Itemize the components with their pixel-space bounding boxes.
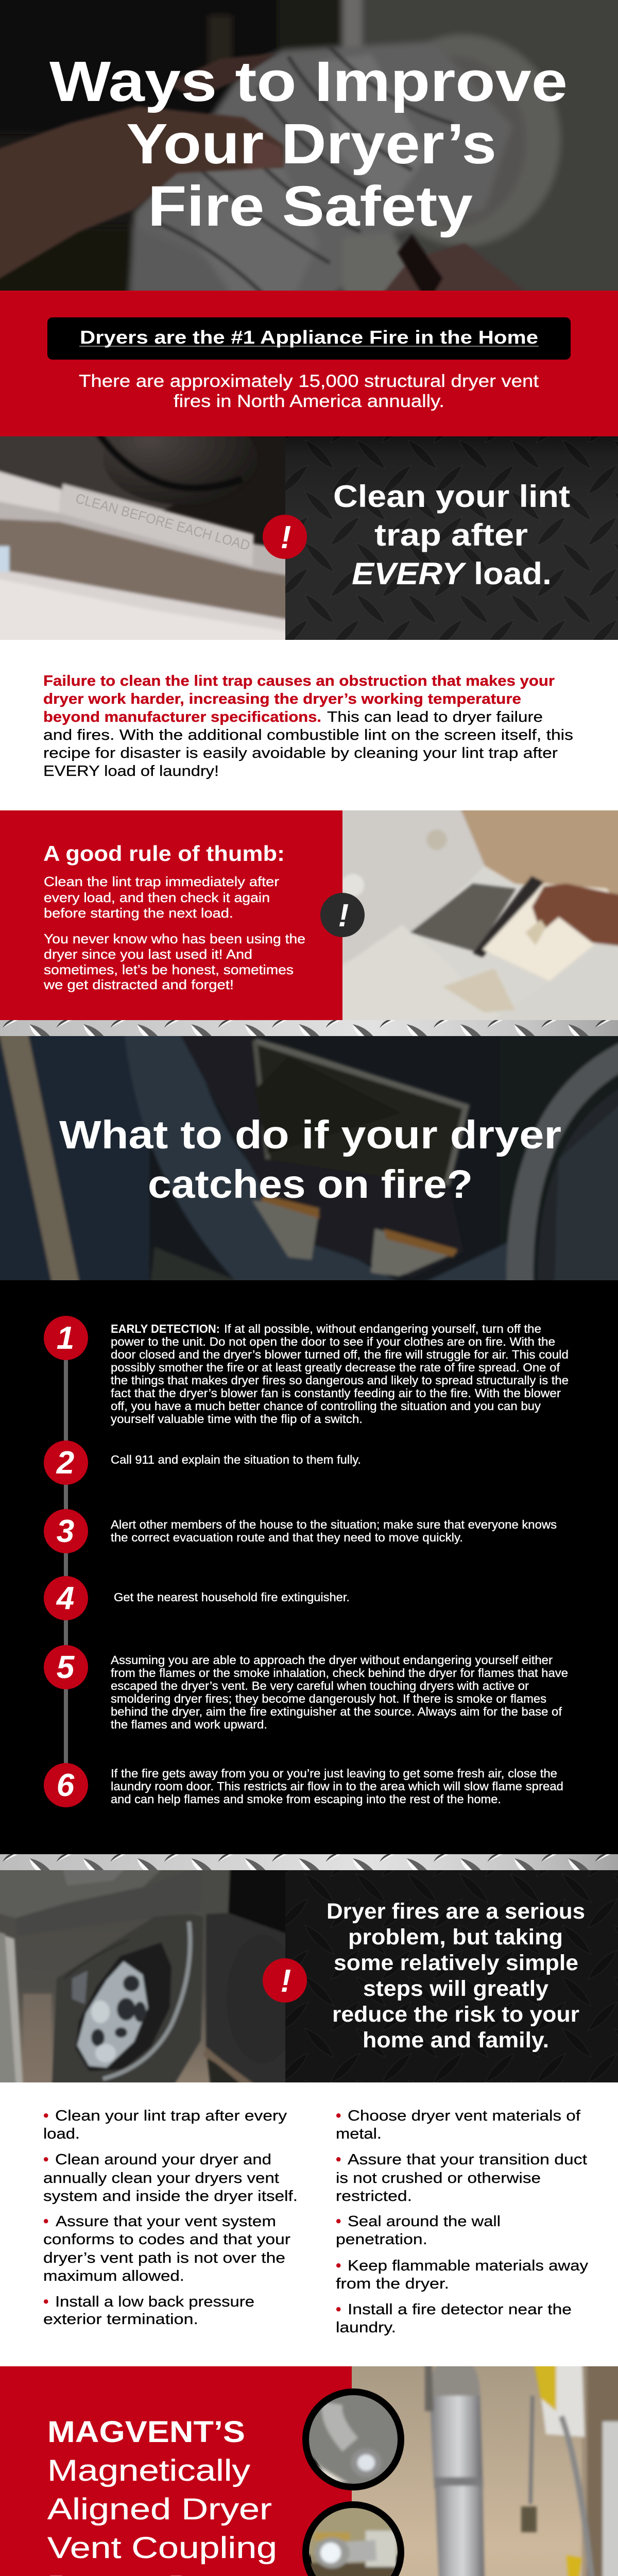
icon: dark exclamation badge: ! [338,898,349,934]
step 6: 6 [57,1768,75,1803]
heading: EVERY [352,556,467,591]
step 3 [44,1509,557,1553]
timeline connector [64,1338,68,1785]
step 4: Get the nearest household fire extinguisher. [114,1590,350,1604]
tips column left: • [43,2151,49,2168]
icon: exclamation badge: ! [281,1963,291,1999]
tips column left: conforms to codes and that your [43,2231,290,2248]
step 5: the flames and work upward. [111,1718,267,1731]
tips column right: • [336,2107,341,2124]
tips column left: dryer’s vent path is not over the [43,2250,285,2266]
lint screen label: CLEAN BEFORE EACH LOAD [74,490,252,553]
text block: lint trap explanation: EVERY load of laundry! [43,763,219,779]
text block: lint trap explanation: and fires. With the additional combustible lint on the screen itself, this [43,727,573,743]
photo: lint trap [0,436,285,640]
icon: exclamation badge [263,1958,307,2003]
step 6: If the fire gets away from you or you’re just leaving to get some fresh air, close the [111,1767,557,1780]
panel: red statistic band [0,291,618,436]
text block: rule of thumb advice: every load, and then check it again [44,890,270,905]
heading: Magvent coupling: Vent Coupling [47,2531,277,2565]
text block: rule of thumb advice: sometimes, let’s be honest, sometimes [44,962,294,977]
tips column left: load. [43,2126,80,2142]
panel: good rule of thumb [0,801,618,1030]
text block: rule of thumb advice [43,874,305,992]
panel: hero header [0,0,618,309]
step 4 [44,1576,350,1620]
text block: lint trap explanation: dryer work harder, increasing the dryer’s working temperature [43,691,521,707]
panel: Magvent product [0,2357,618,2576]
title [49,50,568,238]
icon: exclamation badge: ! [281,520,291,555]
tips column left: • [43,2293,49,2310]
text block: annual statistic [79,371,539,411]
step 5 [44,1645,568,1731]
step 3: Alert other members of the house to the situation; make sure that everyone knows [111,1518,557,1531]
tips column left: maximum allowed. [43,2268,184,2284]
tips column left: • [43,2213,49,2230]
tips column right: Keep flammable materials away [348,2258,589,2274]
heading [327,1899,585,2053]
step 3: 3 [57,1514,74,1549]
step 1: possibly smother the fire or at least greatly decrease the rate of fire spread. One of [111,1361,560,1374]
tips column right: Install a fire detector near the [348,2301,572,2318]
step 6: and can help flames and smoke from escaping into the rest of the home. [111,1792,501,1806]
tips column right: Choose dryer vent materials of [348,2108,581,2124]
tips column right: Assure that your transition duct [348,2151,587,2168]
heading: problem, but taking [348,1925,563,1950]
step 5: from the flames or the smoke inhalation, check behind the dryer for flames that have [111,1666,568,1680]
title: Your Dryer’s [126,112,496,176]
tips column right [336,2107,589,2336]
text block: rule of thumb advice: we get distracted and forget! [43,977,234,992]
heading: load. [474,556,552,591]
tips column right: penetration. [336,2231,427,2248]
tips column right: • [336,2257,341,2274]
photo: pulling out lint screen [342,810,618,1020]
tips column right: Seal around the wall [348,2213,501,2230]
steel divider strip [0,1020,618,1036]
heading [59,1113,561,1207]
heading: catches on fire? [148,1162,473,1207]
step 1: off, you have a much better chance of controlling the situation and you can buy [111,1399,541,1413]
heading: some relatively simple [334,1951,578,1975]
heading [333,479,570,591]
step 1: door closed and the dryer’s blower turned off, the fire will struggle for air. This could [111,1348,569,1361]
step 2: 2 [56,1445,74,1481]
heading: Magvent coupling: Aligned Dryer [47,2493,272,2526]
heading: Magvent coupling: Magnetically [47,2454,250,2487]
panel: what to do heading image [0,1023,618,1293]
photo: installed vent pipe [352,2357,618,2576]
panel: numbered fire steps [0,1280,618,1854]
tips column left: system and inside the dryer itself. [43,2188,298,2205]
heading: home and family. [363,2028,549,2053]
tips column right: • [336,2151,341,2168]
step 5: smoldering dryer fires; they become dangerously hot. If there is smoke or flames [111,1692,546,1705]
step 3: the correct evacuation route and that they need to move quickly. [111,1531,463,1544]
step 1: EARLY DETECTION: [111,1322,220,1335]
step 2 [44,1440,361,1485]
photo: open dryer door [0,1023,618,1293]
text block: annual statistic: There are approximately 15,000 structural dryer vent [79,371,539,391]
photo inset: magnetic elbow [304,2391,404,2491]
panel: clean your lint trap [0,436,618,640]
title: Fire Safety [148,175,473,238]
heading: Magvent coupling: MAGVENT’S [47,2415,245,2449]
text block: lint trap explanation: This can lead to dryer failure [327,709,543,725]
step 5: Assuming you are able to approach the dryer without endangering yourself either [111,1653,553,1667]
tips column right: from the dryer. [336,2276,449,2292]
heading: What to do if your dryer [59,1113,561,1157]
text block: lint trap explanation: Failure to clean the lint trap causes an obstruction that makes your [43,673,555,689]
text block: rule of thumb advice: dryer since you last used it! And [44,946,252,962]
text block: rule of thumb advice: Clean the lint trap immediately after [44,874,279,889]
callout: black banner [47,317,571,360]
text block: lint trap explanation: beyond manufacturer specifications. [43,709,321,725]
text block: annual statistic: fires in North America annually. [174,392,444,411]
heading: Clean your lint [333,479,570,514]
callout: black banner: Dryers are the #1 Appliance Fire in the Home [80,327,538,348]
tips column right: • [336,2213,341,2230]
step 6 [44,1763,563,1807]
step 1: 1 [57,1320,74,1356]
tips column left: Assure that your vent system [56,2213,276,2230]
heading: steps will greatly [363,1976,548,2001]
heading: trap after [374,518,528,552]
text block: rule of thumb advice: before starting the next load. [44,905,233,921]
panel: dark diamond plate heading [285,436,618,640]
icon: exclamation badge [263,515,307,559]
tips column left: exterior termination. [43,2311,198,2328]
text block: lint trap explanation: recipe for disaster is easily avoidable by cleaning your lint trap after [43,745,558,761]
step 1: the things that makes dryer fires so dangerous and likely to spread structurally is the [111,1374,569,1387]
tips column right: metal. [336,2126,382,2142]
tips column left: Clean around your dryer and [55,2151,271,2168]
icon: dark exclamation badge [320,893,365,937]
step 5: escaped the dryer’s vent. Be very careful when touching dryers with active or [111,1679,529,1692]
step 1: yourself valuable time with the flip of a switch. [111,1412,363,1426]
step 1 [44,1316,569,1426]
photo: burned dryer [0,1870,285,2082]
photo inset: coupling [304,2501,404,2576]
step 1: power to the unit. Do not open the door to see if your clothes are on fire. With the [111,1335,555,1348]
step 2: Call 911 and explain the situation to them fully. [111,1453,361,1466]
tips column left [43,2107,298,2328]
heading: A good rule of thumb: [43,841,285,866]
tips column left: Clean your lint trap after every [55,2108,287,2124]
step 5: behind the dryer, aim the fire extinguisher at the source. Always aim for the base of [111,1705,562,1718]
steel divider strip [0,1854,618,1870]
step 4: 4 [56,1581,74,1616]
panel: dark heading [285,1870,618,2082]
heading: reduce the risk to your [332,2002,579,2027]
step 1: If at all possible, without endangering yourself, turn off the [224,1322,541,1335]
text block: rule of thumb advice: You never know who has been using the [44,931,305,946]
hero photo: hands on dryer duct [0,0,618,309]
step 5: 5 [57,1650,75,1685]
step 6: laundry room door. This restricts air flow in to the area which will slow flame spread [111,1780,563,1793]
tips column left: • [43,2107,49,2124]
tips column left: Install a low back pressure [55,2294,254,2310]
tips column right: • [336,2301,341,2318]
tips column right: is not crushed or otherwise [336,2170,541,2187]
title: Ways to Improve [49,50,568,113]
text block: lint trap explanation [0,640,618,810]
heading: Dryer fires are a serious [327,1899,585,1924]
tips column right: restricted. [336,2188,412,2205]
panel: serious problem callout [0,1860,618,2092]
step 1: fact that the dryer’s blower fan is constantly feeding air to the fire. With the blower [111,1386,561,1400]
heading: Magvent coupling [47,2415,277,2576]
tips column left: annually clean your dryers vent [43,2170,279,2187]
tips column right: laundry. [336,2319,396,2336]
panel: safety tips list [0,2082,618,2366]
